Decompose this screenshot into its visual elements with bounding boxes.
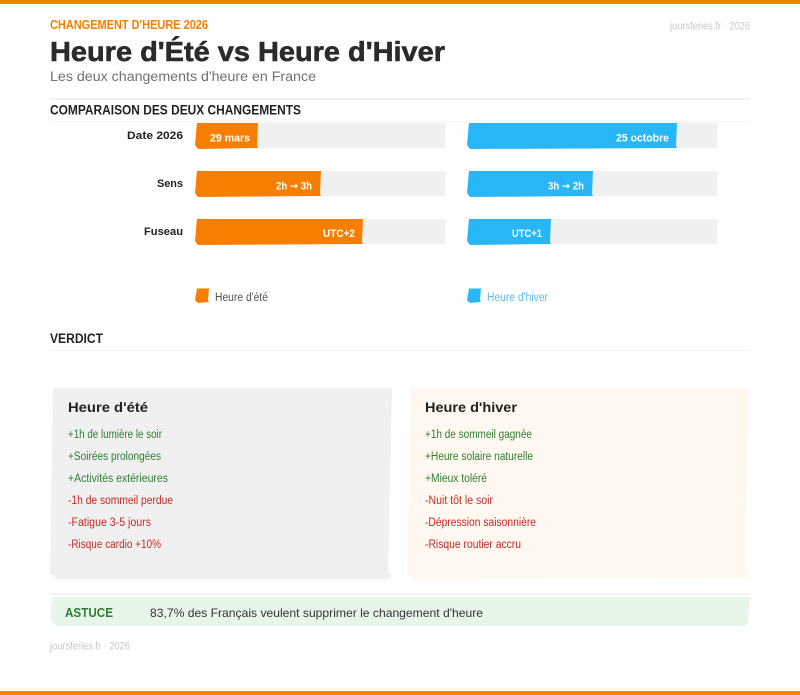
section heading: verdict: VERDICT (50, 331, 104, 346)
panel heading: summer: Heure d'été (68, 399, 148, 415)
bar: date summer: 29 mars (210, 132, 250, 144)
cons: summer: -1h de sommeil perdue (68, 495, 173, 507)
cons: winter: -Risque routier accru (425, 539, 521, 551)
callout label: ASTUCE (65, 606, 113, 620)
pros: winter: +Heure solaire naturelle (425, 451, 533, 463)
header (50, 18, 750, 84)
cons: winter (425, 495, 536, 551)
bottom accent bar (0, 691, 800, 695)
cons: summer (68, 495, 173, 551)
comparison bar chart (127, 123, 719, 245)
pros: winter (425, 429, 533, 485)
pros: summer: +Soirées prolongées (68, 451, 161, 463)
bar: date winter (467, 123, 677, 149)
source tag: joursferies.fr · 2026 (669, 20, 750, 32)
row label: date: Date 2026 (127, 130, 183, 142)
cons: summer: -Fatigue 3-5 jours (68, 517, 151, 529)
section heading: comparison: COMPARAISON DES DEUX CHANGEMENTS (50, 102, 301, 118)
cons: winter: -Nuit tôt le soir (425, 495, 493, 507)
pros: summer (68, 429, 168, 485)
track: time zone summer (195, 219, 447, 244)
legend: winter: Heure d'hiver (487, 292, 548, 304)
cons: summer: -Risque cardio +10% (68, 539, 161, 551)
cons: winter: -Dépression saisonnière (425, 517, 536, 529)
pros: winter: +1h de sommeil gagnée (425, 429, 532, 441)
footer source: joursferies.fr · 2026 (49, 640, 130, 652)
track: direction summer (195, 171, 447, 196)
panel: summer time (50, 388, 392, 579)
bar: date winter: 25 octobre (616, 132, 669, 144)
callout text: 83,7% des Français veulent supprimer le changement d'heure (150, 606, 483, 620)
legend: summer (195, 288, 268, 304)
row: date 2026 (127, 123, 719, 149)
bar: direction winter (467, 171, 593, 197)
track: direction winter (467, 171, 719, 196)
bar: date summer (195, 123, 258, 149)
row label: direction: Sens (157, 178, 183, 190)
panel heading: winter: Heure d'hiver (425, 399, 518, 415)
top accent bar (0, 0, 800, 4)
subtitle: Les deux changements d'heure en France (50, 69, 316, 84)
legend: winter (467, 288, 548, 304)
eyebrow label: CHANGEMENT D'HEURE 2026 (50, 18, 208, 32)
bar: direction winter: 3h → 2h (548, 180, 584, 192)
bar: time zone summer: UTC+2 (323, 228, 355, 240)
bar: direction summer: 2h → 3h (276, 180, 312, 192)
pros: winter: +Mieux toléré (425, 473, 487, 485)
legend: summer: Heure d'été (215, 292, 268, 304)
track: date summer (195, 123, 447, 148)
panel: winter time (407, 388, 748, 579)
bar: time zone winter: UTC+1 (512, 228, 542, 240)
pros: summer: +1h de lumière le soir (68, 429, 162, 441)
bar: time zone winter (467, 219, 551, 245)
callout: tip (50, 597, 750, 626)
row label: time zone: Fuseau (144, 226, 183, 238)
bar: direction summer (195, 171, 321, 197)
title: Heure d'Été vs Heure d'Hiver (50, 36, 445, 67)
track: time zone winter (467, 219, 719, 244)
bar: time zone summer (195, 219, 363, 245)
pros: summer: +Activités extérieures (68, 473, 168, 485)
row: time zone (144, 219, 719, 245)
row: direction (157, 171, 719, 197)
track: date winter (467, 123, 719, 148)
